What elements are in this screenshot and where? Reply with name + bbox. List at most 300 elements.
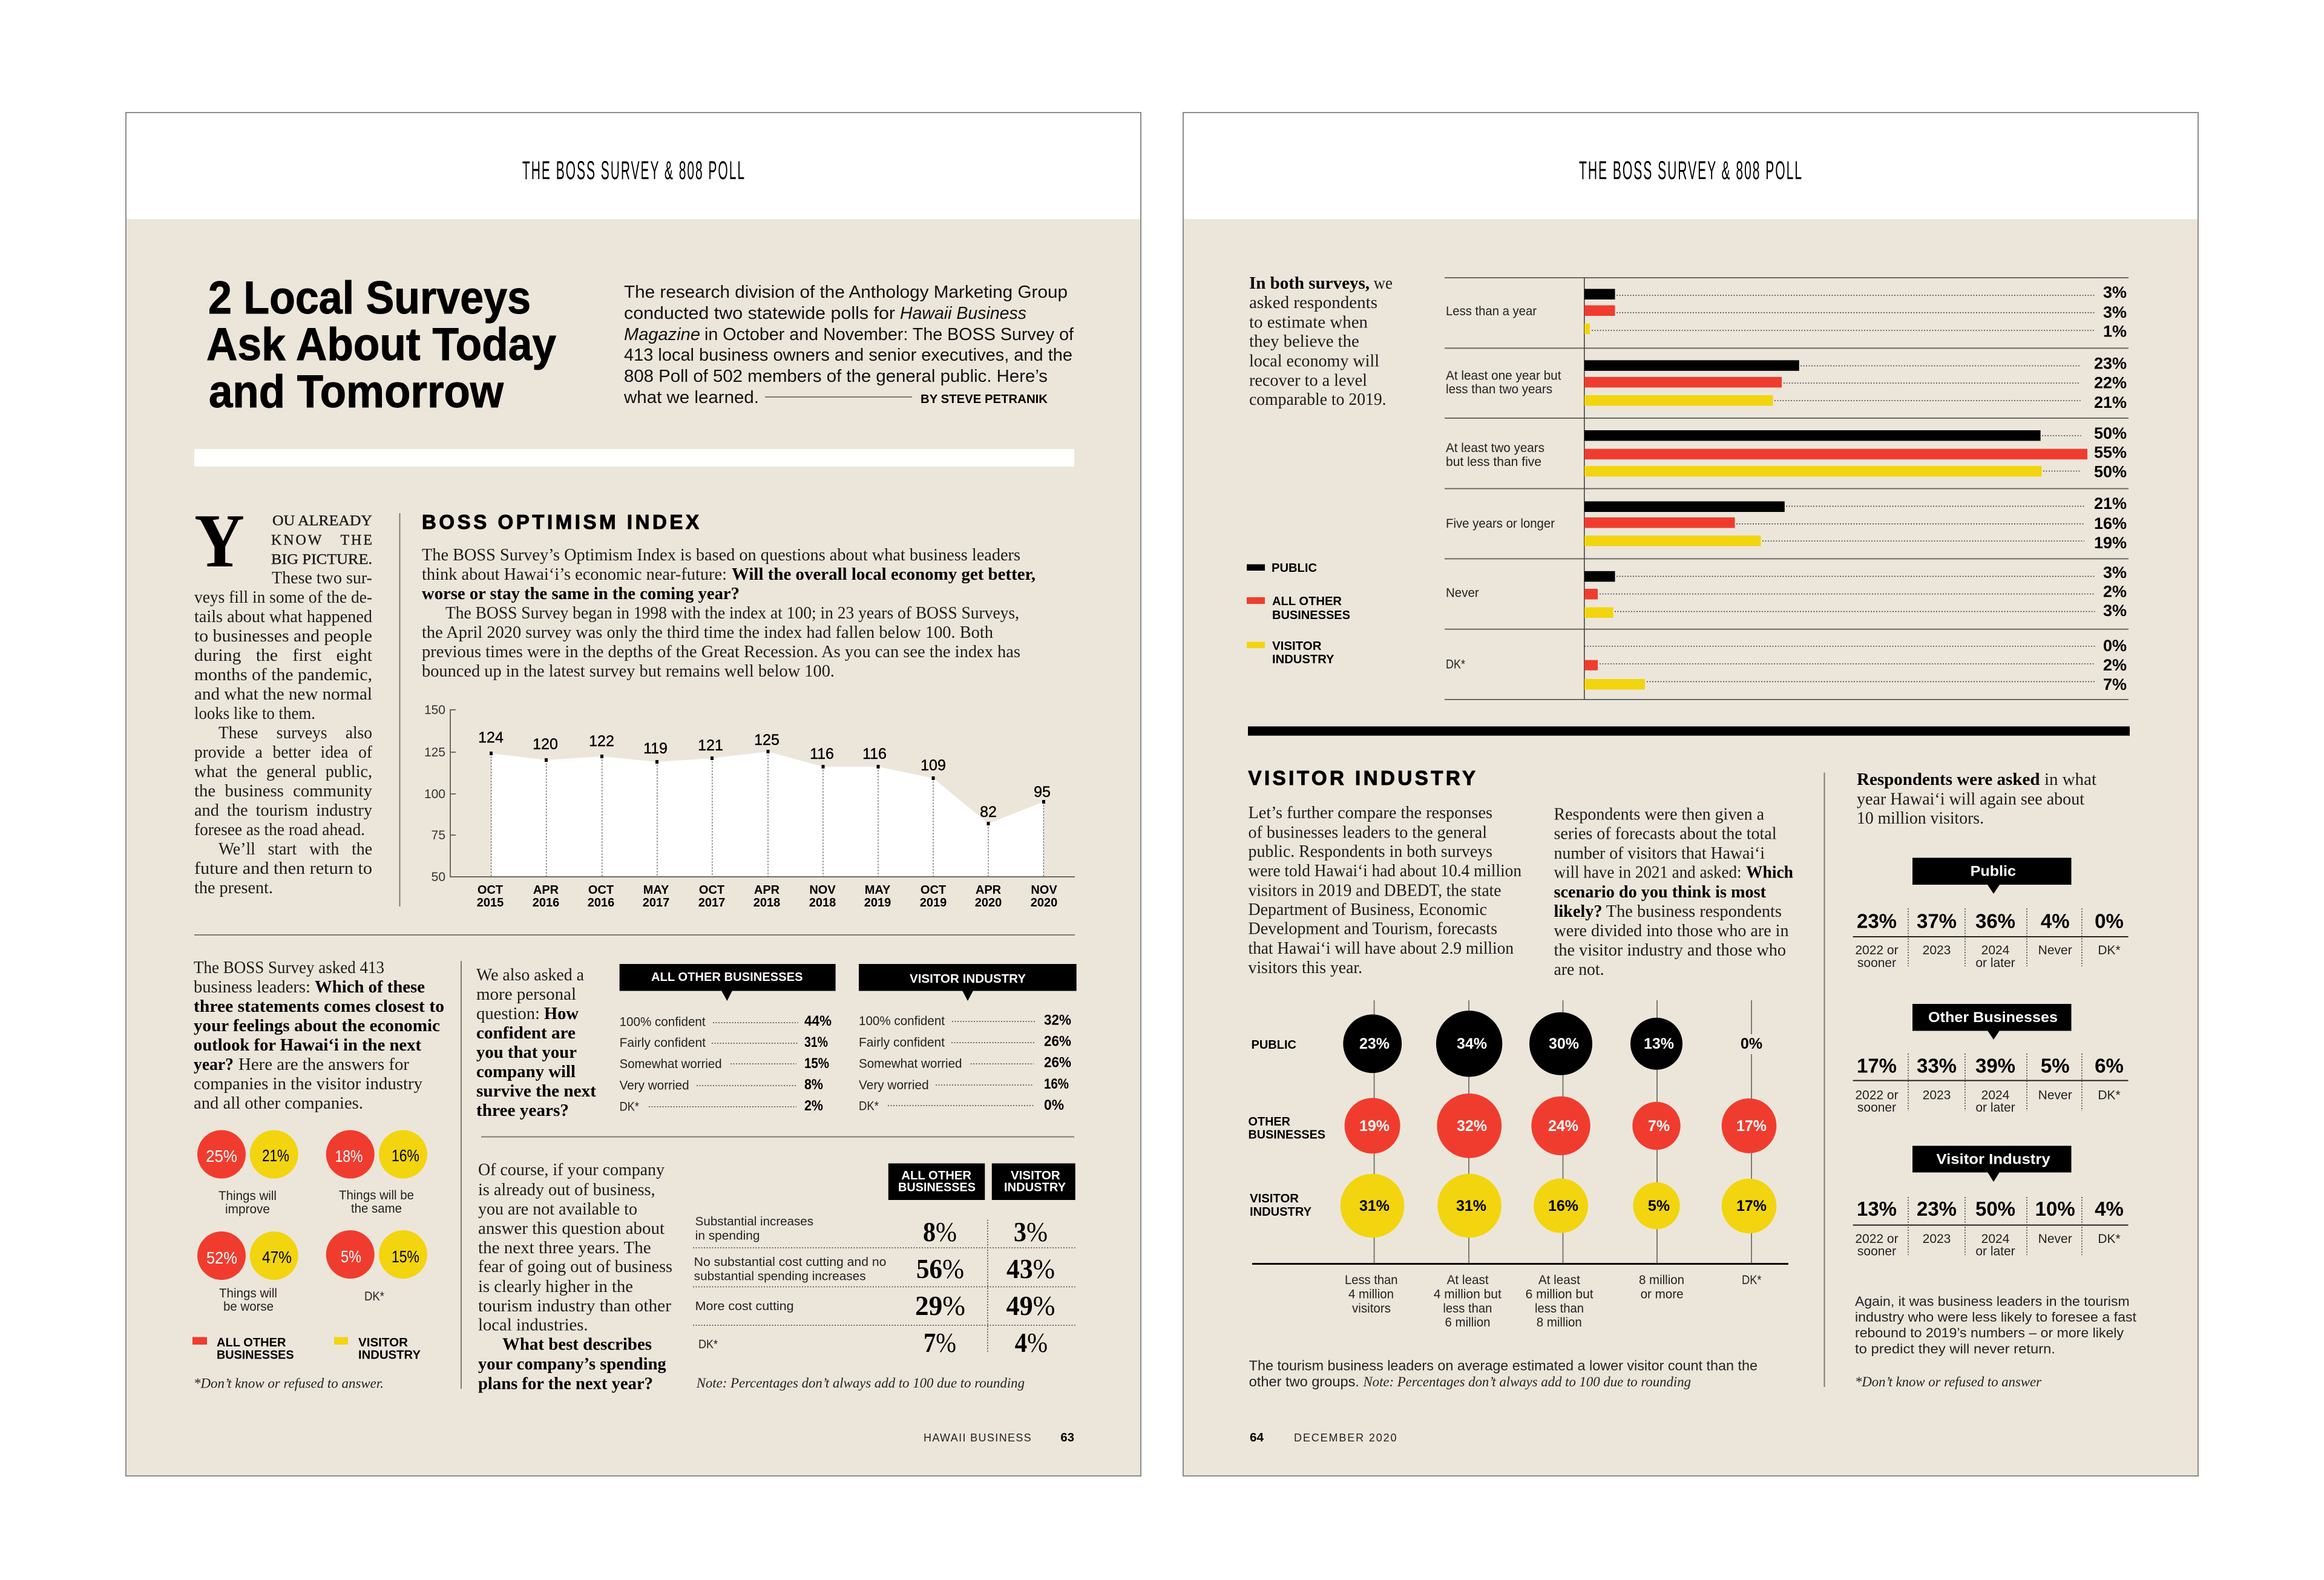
visitor industry text right: were divided into those who are in (1554, 922, 1789, 940)
question text: 10 million visitors: in what (2044, 770, 2096, 789)
row labels: VISITOR (1250, 1192, 1299, 1205)
table: spending plans: More cost cutting (695, 1300, 794, 1313)
x axis labels (477, 883, 1057, 910)
question text: confidence: you that your (476, 1043, 577, 1062)
question text: spending plans: tourism industry than other (478, 1297, 672, 1316)
things will be the same (326, 1130, 427, 1216)
things will be worse (197, 1231, 298, 1314)
question text: confidence: question: (476, 1005, 540, 1023)
intro text: 413 local business owners and senior executives, and the (624, 346, 1072, 365)
year table: visitor industry (1853, 1146, 2129, 1259)
intro text: in October and November: The BOSS Survey of (704, 325, 1074, 344)
callout header (1912, 858, 2071, 894)
visitor industry text right: the visitor industry and those who (1554, 941, 1786, 960)
table: visitor industry confidence: 26% (1044, 1034, 1071, 1049)
bar group: five years or longer: 19% (2094, 534, 2127, 552)
visitor industry text left: Department of Business, Economic (1248, 900, 1487, 919)
row: public bubbles: 13% (1644, 1035, 1674, 1052)
article text: future and then return to (194, 859, 372, 878)
bar group: two to five years: 50% (2094, 424, 2127, 442)
legend: recovery chart: BUSINESSES (1272, 609, 1350, 622)
recovery question text: recover to a level (1249, 372, 1367, 390)
year table: other businesses: 39% (1975, 1054, 2015, 1077)
tourism note: The tourism business leaders on average estimated a lower visitor count than the (1249, 1358, 1758, 1374)
column labels: less than (1443, 1302, 1492, 1316)
column labels: or more (1641, 1288, 1684, 1302)
bar group: five years or longer: 16% (2094, 514, 2127, 533)
year table: visitor industry: 4% (2095, 1198, 2124, 1220)
article text: and what the new normal (194, 685, 372, 704)
question text: economic outlook: outlook for Hawai‘i in the next (194, 1036, 422, 1055)
question text: 10 million visitors: year Hawai‘i will again see about (1857, 790, 2084, 808)
legend: recovery chart (1247, 562, 1350, 666)
recovery question text: we (1374, 274, 1393, 293)
year table: visitor industry: 13% (1857, 1198, 1897, 1220)
visitor industry text right: are not. (1554, 960, 1604, 979)
data values: 119 (643, 740, 668, 757)
year table: public: 4% (2041, 910, 2070, 932)
year table: public: 2023 (1923, 943, 1951, 957)
visitor industry text right: likely? (1554, 902, 1603, 921)
article text: during the first eight (194, 646, 372, 665)
DK (326, 1230, 427, 1303)
panel: left page (126, 113, 1141, 1476)
column labels: At least (1447, 1273, 1489, 1287)
x axis labels: 2018 (809, 896, 836, 910)
visitor industry text right: scenario do you think is most (1554, 883, 1767, 902)
question text: spending plans: local industries. (478, 1316, 588, 1335)
question text: spending plans: answer this question about (478, 1219, 665, 1238)
data values: 120 (533, 736, 558, 753)
closing text (1855, 1294, 2136, 1357)
y axis labels: 150 (424, 703, 445, 717)
visitor industry text left: visitors this year. (1248, 959, 1362, 977)
visitor industry text left: visitors in 2019 and DBEDT, the state (1248, 882, 1501, 900)
question text: confidence: confident are (476, 1024, 576, 1043)
x axis labels: OCT (699, 883, 724, 897)
bar group: one to two years: At least one year but (1446, 369, 1561, 382)
visitor industry text right: Respondents were then given a (1554, 805, 1765, 824)
question text: economic outlook: Which of these (315, 978, 425, 997)
x axis labels: 2018 (753, 896, 780, 910)
table: spending plans: No substantial cost cutting and no (694, 1256, 886, 1269)
article text: These surveys also (218, 724, 372, 742)
year table: visitor industry: 2023 (1923, 1232, 1951, 1246)
legend: outlook: BUSINESSES (217, 1349, 294, 1362)
article text: what the general public, (194, 762, 372, 781)
year table: other businesses: Never (2038, 1088, 2072, 1103)
table: visitor industry confidence: Very worried (859, 1078, 929, 1092)
year table: other businesses: DK* (2098, 1088, 2121, 1103)
things will improve: Things will (218, 1189, 277, 1203)
legend: recovery chart: VISITOR (1272, 640, 1322, 653)
article text: We’ll start with the (218, 840, 372, 859)
legend: outlook: INDUSTRY (358, 1349, 421, 1362)
row: visitor industry bubbles: 17% (1736, 1198, 1767, 1215)
footer left (924, 1431, 1074, 1444)
x axis labels: OCT (478, 883, 503, 897)
column header: all other businesses (888, 1163, 985, 1200)
bar group: two to five years (1446, 424, 2127, 481)
data values: 95 (1034, 784, 1051, 801)
bar group: never: 3% (2103, 602, 2127, 620)
intro text: The research division of the Anthology Marketing Group (624, 283, 1068, 302)
column labels: 8 million (1639, 1273, 1684, 1287)
question text: spending plans: is already out of business, (478, 1181, 655, 1199)
row: visitor industry bubbles (1341, 1174, 1776, 1237)
bar group: one to two years (1446, 355, 2127, 411)
bubble chart: visitor forecast (1248, 1000, 1788, 1329)
question text: economic outlook: your feelings about the economic (194, 1017, 440, 1035)
recovery question text: local economy will (1249, 352, 1379, 370)
year table: other businesses: 2023 (1923, 1088, 1951, 1103)
visitor industry text right: Which (1746, 863, 1793, 882)
y axis labels: 125 (424, 746, 445, 759)
callout header: Other Businesses (1928, 1009, 2058, 1026)
row: public bubbles: 23% (1359, 1035, 1390, 1052)
table: all other businesses confidence (620, 964, 836, 1114)
callout header (1912, 1146, 2071, 1182)
title: 2 Local Surveys (208, 272, 531, 324)
table: all other businesses confidence: 2% (804, 1098, 823, 1114)
x axis labels: MAY (865, 883, 891, 897)
table: visitor industry confidence: 26% (1044, 1054, 1071, 1071)
legend: recovery chart: ALL OTHER (1272, 595, 1342, 608)
row: other businesses bubbles: 32% (1457, 1118, 1487, 1135)
optimism index text: worse or stay the same in the coming year? (422, 585, 740, 603)
x axis labels: NOV (809, 883, 836, 897)
visitor industry text right (1554, 805, 1793, 979)
year table: other businesses (1853, 1004, 2129, 1115)
year table: public: or later (1975, 956, 2015, 970)
x axis labels: OCT (921, 883, 946, 897)
data values: 109 (921, 757, 946, 774)
bar group: one to two years: 23% (2094, 355, 2127, 373)
question text: spending plans: your company’s spending (478, 1355, 666, 1374)
article text (194, 513, 373, 897)
column header: visitor industry (992, 1163, 1075, 1200)
article text: BIG PICTURE. (271, 552, 372, 568)
x axis labels: 2016 (533, 896, 559, 910)
table: visitor industry confidence: DK* (859, 1100, 879, 1113)
optimism index text: The BOSS Survey began in 1998 with the index at 100; in 23 years of BOSS Surveys, (445, 604, 1019, 623)
column labels: visitors (1352, 1302, 1391, 1316)
y axis labels: 100 (424, 787, 445, 801)
x axis labels: APR (754, 883, 780, 897)
column header: all other businesses: ALL OTHER (901, 1169, 972, 1182)
article text: tails about what happened (194, 608, 372, 626)
footnote left: *Don’t know or refused to answer. (194, 1376, 384, 1391)
table: all other businesses confidence: 15% (804, 1055, 829, 1072)
year table: other businesses: 6% (2095, 1054, 2124, 1077)
y axis labels (424, 703, 445, 884)
column labels: 6 million but (1526, 1288, 1594, 1302)
data values: 125 (754, 732, 780, 749)
year table: public: DK* (2098, 943, 2121, 957)
column labels: less than (1535, 1302, 1584, 1316)
y axis labels: 75 (432, 828, 445, 842)
legend: outlook: ALL OTHER (217, 1336, 286, 1349)
year table: public: 0% (2095, 910, 2124, 932)
closing text: to predict they will never return. (1855, 1342, 2055, 1357)
legend: recovery chart: INDUSTRY (1272, 653, 1334, 666)
year table: public: 23% (1857, 910, 1897, 932)
bar group: never: 3% (2103, 563, 2127, 582)
x axis labels: MAY (643, 883, 669, 897)
row: public bubbles: 0% (1741, 1035, 1762, 1052)
article text: foresee as the road ahead. (194, 821, 365, 839)
visitor industry text left: public. Respondents in both surveys (1248, 842, 1492, 861)
footer left: HAWAII BUSINESS (924, 1432, 1031, 1444)
intro text (623, 283, 1074, 407)
data values: 116 (810, 746, 834, 762)
row: visitor industry bubbles: 16% (1548, 1198, 1578, 1215)
table: spending plans: 7% (924, 1327, 956, 1358)
table: spending plans: 56% (916, 1253, 964, 1284)
tourism note: Note: Percentages don’t always add to 100 due to rounding (1363, 1374, 1691, 1389)
bar group: two to five years: 50% (2094, 463, 2127, 481)
question text: 10 million visitors: 10 million visitors. (1857, 809, 1984, 828)
question text: confidence: three years? (476, 1101, 569, 1120)
column header: all other businesses: BUSINESSES (898, 1181, 976, 1195)
closing text: rebound to 2019’s numbers – or more likely (1855, 1325, 2124, 1340)
column labels: 8 million (1537, 1316, 1582, 1329)
DK: 15% (392, 1247, 419, 1266)
visitor industry text right: number of visitors that Hawai‘i (1554, 844, 1765, 863)
bar group: five years or longer (1446, 494, 2127, 552)
bar group: DK: 2% (2103, 656, 2127, 674)
year table: other businesses: 17% (1857, 1054, 1897, 1077)
bar group: less than a year: 3% (2103, 283, 2127, 301)
title (206, 272, 556, 418)
x axis labels: 2017 (643, 896, 669, 910)
table: all other businesses confidence: 100% confident (620, 1015, 706, 1029)
things will be the same: the same (351, 1202, 402, 1216)
legend: outlook: VISITOR (358, 1336, 409, 1349)
x axis labels: NOV (1031, 883, 1057, 897)
things will improve: 25% (206, 1147, 237, 1165)
question text: economic outlook (194, 959, 444, 1113)
intro text: 808 Poll of 502 members of the general public. Here’s (624, 367, 1048, 386)
table: all other businesses confidence: Very worried (620, 1079, 689, 1093)
article text: and the tourism industry (194, 801, 372, 820)
table: spending plans: Substantial increases (695, 1215, 813, 1228)
footer right (1250, 1431, 1397, 1444)
table: spending plans: 43% (1006, 1253, 1055, 1284)
table: spending plans: 49% (1006, 1290, 1055, 1321)
recovery question text: they believe the (1249, 332, 1359, 351)
table: all other businesses confidence: Somewhat worried (620, 1057, 722, 1071)
callout header (1912, 1004, 2071, 1040)
question text: spending plans: is clearly higher in the (478, 1277, 633, 1296)
table: spending plans: 3% (1014, 1216, 1048, 1247)
question text: economic outlook: companies in the visitor industry (194, 1075, 422, 1093)
things will be the same: 18% (335, 1147, 363, 1165)
optimism index text: the April 2020 survey was only the third time the index had fallen below 100. Both (422, 623, 993, 642)
chart area (491, 752, 1043, 877)
article text: These two sur- (272, 569, 372, 588)
column header: visitor industry: VISITOR (1011, 1169, 1060, 1182)
bar group: DK (1446, 637, 2127, 693)
things will improve: 21% (262, 1146, 289, 1165)
year table: other businesses: 33% (1917, 1054, 1957, 1077)
callout header: Public (1971, 863, 2016, 880)
article column (194, 499, 373, 897)
row: other businesses bubbles: 24% (1548, 1118, 1578, 1135)
question text: confidence: We also asked a (476, 966, 585, 985)
row: other businesses bubbles: 19% (1359, 1118, 1390, 1135)
year table: visitor industry: 10% (2035, 1198, 2075, 1220)
question text: spending plans: plans for the next year? (478, 1374, 653, 1393)
question text: spending plans (478, 1161, 672, 1393)
visitor industry text right: will have in 2021 and asked: (1554, 863, 1742, 882)
table: all other businesses confidence: Fairly confident (620, 1036, 706, 1050)
heading: BOSS Optimism Index: BOSS OPTIMISM INDEX (422, 511, 699, 533)
bar group: two to five years: 55% (2094, 443, 2127, 461)
year table: visitor industry: DK* (2098, 1232, 2121, 1246)
question text: economic outlook: The BOSS Survey asked 413 (194, 959, 384, 977)
optimism index text: think about Hawai‘i’s economic near-future: (422, 565, 727, 584)
data values: 124 (478, 729, 504, 746)
line chart: optimism index (424, 703, 1075, 910)
column labels: 4 million (1348, 1288, 1394, 1302)
year table: public: 36% (1975, 910, 2015, 932)
callout header: VISITOR INDUSTRY (910, 972, 1026, 986)
year table: other businesses: sooner (1857, 1101, 1896, 1115)
things will be worse: 52% (206, 1248, 237, 1267)
year table: visitor industry: sooner (1857, 1245, 1896, 1259)
panel: right page: THE BOSS SURVEY & 808 POLL (1579, 156, 1803, 185)
optimism index text (422, 546, 1036, 681)
visitor industry text right: series of forecasts about the total (1554, 825, 1777, 844)
year table: visitor industry: 50% (1975, 1198, 2015, 1220)
DK: 5% (341, 1247, 361, 1266)
x axis labels: APR (976, 883, 1002, 897)
year table: visitor industry: 2022 or (1855, 1232, 1899, 1246)
visitor industry text right: The business respondents (1606, 902, 1782, 921)
question text: economic outlook: year? (194, 1055, 234, 1074)
x axis labels: 2017 (698, 896, 725, 910)
legend: recovery chart: PUBLIC (1272, 562, 1317, 575)
year table: other businesses: 2022 or (1855, 1088, 1899, 1103)
DK: DK* (364, 1290, 384, 1303)
year table: visitor industry: or later (1975, 1245, 2015, 1259)
bar group: less than a year: 3% (2103, 303, 2127, 321)
x axis labels: 2016 (588, 896, 614, 910)
bar group: DK: DK* (1446, 657, 1465, 672)
year table: other businesses: 5% (2041, 1054, 2070, 1077)
intro text: BY STEVE PETRANIK (921, 393, 1048, 406)
column labels: Less than (1345, 1273, 1398, 1287)
data values: 82 (980, 804, 997, 821)
footer left: 63 (1060, 1431, 1074, 1444)
tourism note (1249, 1358, 1758, 1389)
question text: spending plans: Of course, if your company (478, 1161, 665, 1179)
row: other businesses bubbles: 7% (1648, 1118, 1670, 1135)
bar group: two to five years: At least two years (1446, 441, 1544, 455)
article text: provide a better idea of (194, 743, 373, 762)
things will be worse: be worse (223, 1300, 274, 1314)
data values: 122 (589, 733, 614, 750)
row labels: OTHER (1248, 1115, 1291, 1129)
question text: confidence: company will (476, 1063, 576, 1081)
column labels (1345, 1273, 1761, 1329)
footnote right: *Don’t know or refused to answer (1855, 1374, 2042, 1389)
title: and Tomorrow (209, 366, 504, 418)
bar group: DK: 7% (2103, 675, 2127, 693)
table: spending plans: DK* (698, 1338, 718, 1351)
intro text: Hawaii Business (900, 304, 1026, 323)
bar chart: economic recovery (1445, 278, 2129, 700)
year table: visitor industry: 2024 (1981, 1232, 2010, 1246)
row: visitor industry bubbles: 5% (1648, 1198, 1670, 1215)
table: spending plans: 4% (1015, 1327, 1048, 1358)
table: all other businesses confidence: 8% (804, 1077, 823, 1093)
year table: public (1853, 858, 2129, 970)
closing text: industry who were less likely to foresee a fast (1855, 1310, 2136, 1325)
table: spending plans: in spending (695, 1230, 760, 1243)
table: all other businesses confidence: 44% (804, 1013, 832, 1029)
year table: visitor industry: Never (2038, 1232, 2072, 1246)
year table: public: 37% (1917, 910, 1957, 932)
year table: other businesses: or later (1975, 1101, 2015, 1115)
bar group: never (1446, 563, 2127, 620)
table: spending plans: 29% (915, 1290, 965, 1321)
optimism index text: Will the overall local economy get better, (732, 565, 1036, 584)
title: Ask About Today (206, 319, 556, 370)
article text: the present. (194, 879, 273, 897)
bar group: two to five years: but less than five (1446, 455, 1541, 469)
circle chart: outlook (197, 1130, 427, 1314)
year table: other businesses: 2024 (1981, 1088, 2010, 1103)
data values (478, 729, 1051, 821)
bar group: one to two years: 22% (2094, 374, 2127, 392)
table: visitor industry confidence (859, 964, 1077, 1113)
year table: public: Never (2038, 943, 2072, 957)
x axis labels: 2019 (864, 896, 891, 910)
callout header: ALL OTHER BUSINESSES (651, 971, 803, 984)
tourism note: other two groups. (1249, 1374, 1359, 1389)
question text: economic outlook: and all other companies. (194, 1094, 363, 1113)
row labels (1248, 1038, 1325, 1219)
visitor industry text left: that Hawai‘i will have about 2.9 million (1248, 939, 1514, 958)
row: visitor industry bubbles: 31% (1359, 1198, 1390, 1215)
question text: economic outlook: three statements comes closest to (194, 997, 444, 1016)
question text: 10 million visitors: Respondents were asked (1857, 770, 2040, 789)
article text: OU ALREADY (272, 513, 372, 529)
row: public bubbles (1343, 1011, 1762, 1077)
data values: 121 (698, 737, 723, 754)
visitor industry text left (1248, 804, 1521, 977)
year table: public: sooner (1857, 956, 1896, 970)
table: spending plans: substantial spending increases (694, 1270, 866, 1283)
table: all other businesses confidence: 31% (804, 1034, 828, 1051)
bar group: five years or longer: Five years or longer (1446, 517, 1555, 531)
things will be the same: 16% (392, 1146, 419, 1165)
year table: public: 2024 (1981, 943, 2010, 957)
intro text: Magazine (624, 325, 700, 344)
bar group: one to two years: less than two years (1446, 382, 1552, 396)
x axis labels: OCT (588, 883, 614, 897)
row: visitor industry bubbles: 31% (1456, 1198, 1486, 1215)
question text: spending plans: What best describes (502, 1335, 652, 1354)
table: visitor industry confidence: 16% (1044, 1076, 1069, 1092)
things will be the same: Things will be (339, 1188, 414, 1202)
column labels: 6 million (1445, 1316, 1490, 1329)
question text: economic outlook: business leaders: (194, 978, 310, 997)
row: other businesses bubbles (1345, 1093, 1776, 1158)
bar group: never: Never (1446, 586, 1479, 600)
